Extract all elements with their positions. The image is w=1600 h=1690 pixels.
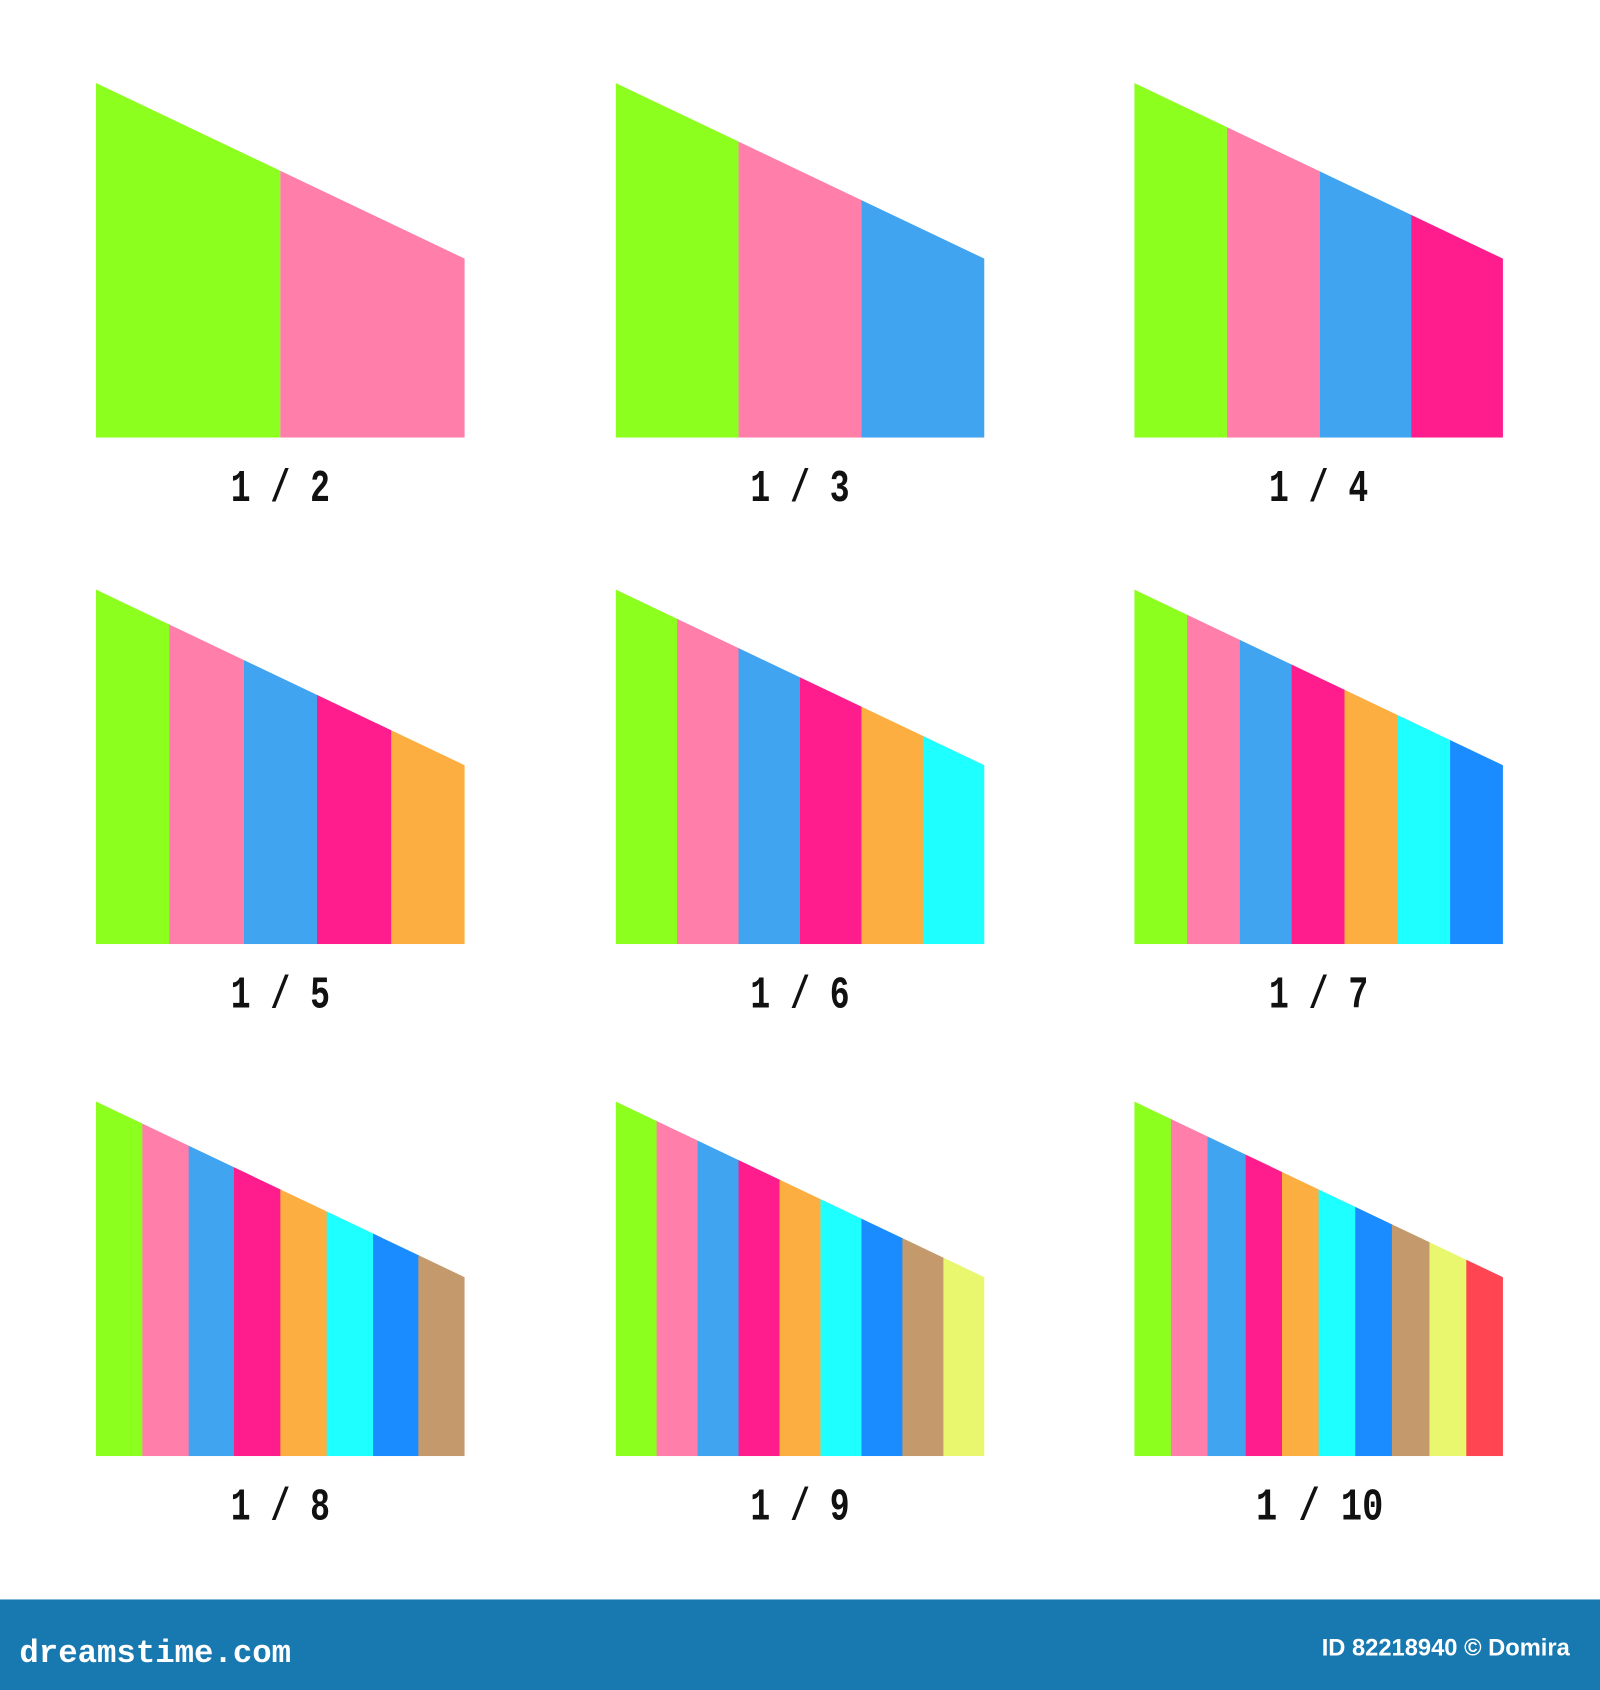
panel: 1/8 xyxy=(96,1094,466,1460)
footer bar: ID 82218940 © Domira xyxy=(1322,1636,1571,1662)
panel: 1/2 xyxy=(96,75,466,442)
label: 1/8: 1 / 8 xyxy=(231,1482,330,1534)
label: 1/9: 1 / 9 xyxy=(750,1482,850,1534)
label: 1/2: 1 / 2 xyxy=(231,463,330,515)
panel: 1/6 xyxy=(616,582,985,948)
panel: 1/7 xyxy=(1134,582,1504,948)
label: 1/7: 1 / 7 xyxy=(1269,970,1368,1022)
label: 1/4: 1 / 4 xyxy=(1269,463,1368,515)
label: 1/3: 1 / 3 xyxy=(750,463,850,515)
label: 1/5: 1 / 5 xyxy=(231,970,330,1022)
label: 1/10: 1 / 10 xyxy=(1256,1482,1383,1534)
panel: 1/4 xyxy=(1134,75,1504,442)
panel: 1/3 xyxy=(616,75,985,442)
label: 1/6: 1 / 6 xyxy=(750,970,850,1022)
panel: 1/5 xyxy=(96,582,466,948)
footer bar xyxy=(0,1599,1600,1690)
footer bar: dreamstime.com xyxy=(19,1635,291,1672)
panel: 1/9 xyxy=(616,1094,985,1460)
panel: 1/10 xyxy=(1134,1094,1504,1460)
